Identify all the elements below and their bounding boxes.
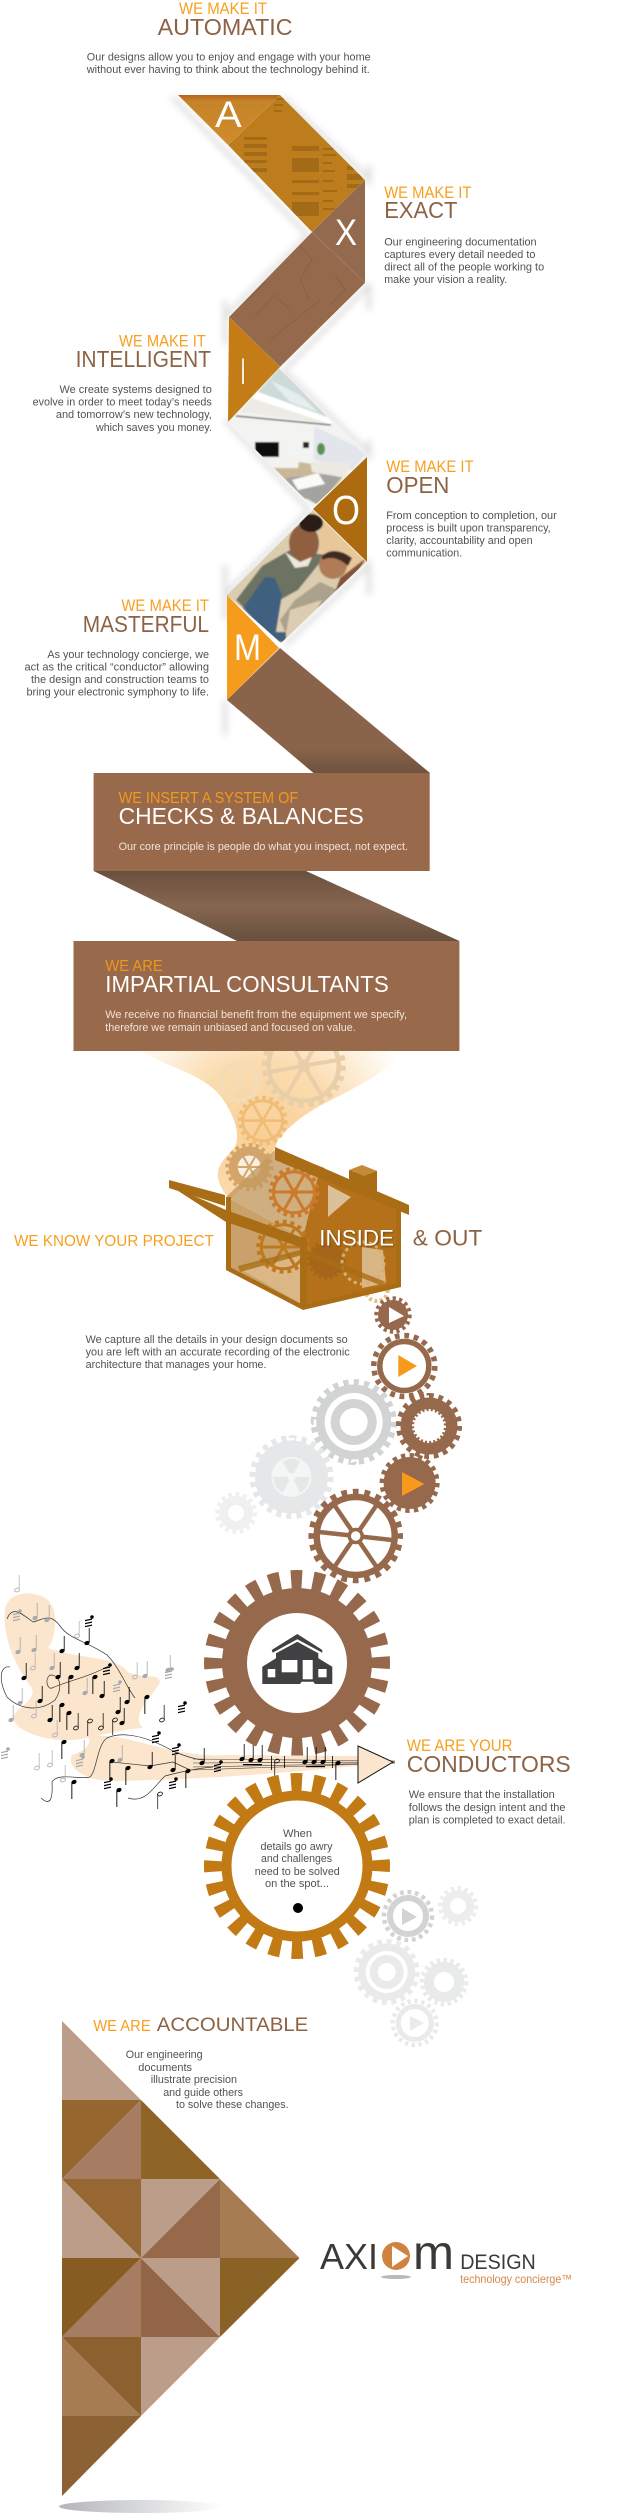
heading: inside: INSIDE — [319, 1226, 394, 1251]
heading: exact: EXACT — [384, 197, 457, 223]
text block: open: From conception to completion, our — [386, 510, 557, 522]
gear: faint — [217, 1494, 255, 1532]
text block: accountable — [126, 2049, 289, 2111]
text block: capture details: you are left with an accurate recording of the electronic — [86, 1347, 350, 1359]
heading: open — [386, 457, 474, 498]
text block: conductors — [409, 1789, 566, 1826]
text block: exact: direct all of the people working to — [384, 262, 544, 274]
heading: conductors — [407, 1736, 571, 1777]
photo: family — [227, 510, 366, 643]
logo: DESIGN — [460, 2251, 536, 2274]
heading: masterful: MASTERFUL — [83, 611, 209, 637]
gear: pale play — [393, 2001, 437, 2045]
music: flowing curves — [1, 1612, 213, 1801]
small gear below house — [366, 1279, 388, 1301]
text block: open — [386, 510, 557, 560]
ribbon panel: letter A — [178, 94, 280, 145]
text block: automatic — [86, 52, 371, 76]
gear: spoked — [311, 1492, 400, 1580]
heading: intelligent: WE MAKE IT — [119, 332, 206, 351]
ribbon panel: letter A: A — [215, 94, 242, 135]
gear: grey play — [384, 1892, 432, 1940]
ribbon fold to checks box — [227, 648, 430, 773]
gear: pale serrated — [422, 1960, 466, 2004]
arrow head — [358, 1746, 393, 1783]
music: grey notes — [1, 1575, 174, 1783]
text block: accountable: Our engineering — [126, 2049, 203, 2061]
text block: conductors: We ensure that the installation — [409, 1789, 555, 1801]
text block: intelligent: We create systems designed to — [60, 384, 212, 396]
music: staff lines — [193, 1759, 395, 1770]
gear text: When — [283, 1828, 312, 1840]
text block: masterful: bring your electronic symphony to life. — [26, 686, 209, 698]
icon: house — [262, 1634, 332, 1684]
heading: accountable: WE ARE — [93, 2018, 151, 2035]
text block: automatic: without ever having to think about the technology behind it. — [86, 64, 370, 76]
ribbon panel: letter X — [312, 180, 365, 283]
heading: exact: WE MAKE IT — [384, 183, 472, 202]
gear: solid play — [382, 1456, 437, 1510]
text block: masterful: the design and construction teams to — [31, 674, 209, 686]
gear: faint right — [440, 1888, 476, 1924]
text block: capture details — [86, 1334, 350, 1371]
text block: accountable: illustrate precision — [151, 2074, 237, 2086]
text block: intelligent: and tomorrow’s new technology, — [56, 409, 212, 421]
house: frame bands — [169, 1147, 409, 1310]
text block: accountable: documents — [138, 2062, 192, 2074]
gear: orange play — [374, 1336, 435, 1396]
panel: impartial consultants: IMPARTIAL CONSULTANTS — [105, 971, 389, 997]
text block: conductors: follows the design intent and the — [409, 1802, 566, 1814]
panel: impartial consultants — [74, 941, 459, 1051]
ribbon panel: letter X: X — [335, 212, 357, 253]
text block: accountable: to solve these changes. — [176, 2099, 289, 2111]
text block: conductors: plan is completed to exact detail. — [409, 1814, 566, 1826]
heading: exact — [384, 183, 472, 223]
text block: exact: make your vision a reality. — [384, 274, 507, 286]
gear text — [255, 1828, 340, 1890]
text block: intelligent — [33, 384, 212, 434]
music notes arrow — [1, 1575, 397, 1809]
logo: play circle — [381, 2242, 411, 2279]
ribbon panel: letter M — [227, 595, 279, 700]
music: cream wash — [5, 1593, 397, 1781]
text block: open: communication. — [386, 548, 462, 560]
heading: know your project: WE KNOW YOUR PROJECT — [14, 1233, 214, 1250]
text block: intelligent: which saves you money. — [95, 422, 212, 434]
logo: m — [413, 2227, 454, 2280]
gear: small play — [376, 1298, 410, 1332]
panel: impartial consultants: We receive no financial benefit from the equipment we specify, — [105, 1009, 407, 1021]
text block: capture details: architecture that manages your home. — [86, 1359, 266, 1371]
ribbon panel: brown blueprint — [229, 232, 365, 367]
ribbon panel: letter I — [228, 317, 280, 422]
gear text: need to be solved — [255, 1866, 340, 1878]
text block: accountable: and guide others — [163, 2087, 243, 2099]
ribbon fold between panels — [94, 871, 459, 941]
triangle mosaic — [62, 2021, 300, 2496]
panel: impartial consultants: WE ARE — [105, 958, 163, 975]
logo: AXI — [320, 2236, 378, 2277]
heading: open: WE MAKE IT — [386, 457, 474, 476]
gear text: details go awry — [260, 1841, 333, 1853]
gear: when details go awry — [214, 1783, 380, 1949]
text block: masterful: As your technology concierge, we — [47, 649, 209, 661]
funnel of gears — [140, 1027, 398, 1200]
music: black notes — [21, 1615, 341, 1809]
heading: conductors: WE ARE YOUR — [407, 1736, 512, 1755]
heading: automatic — [158, 0, 293, 40]
text block: exact — [384, 237, 544, 286]
heading: and out: & OUT — [413, 1226, 483, 1251]
panel: impartial consultants: therefore we remain unbiased and focused on value. — [105, 1022, 356, 1034]
heading: open: OPEN — [386, 472, 449, 498]
panel: checks and balances — [94, 773, 430, 871]
gear text: on the spot... — [265, 1878, 329, 1890]
heading: automatic: AUTOMATIC — [158, 14, 293, 40]
heading: intelligent — [76, 332, 211, 372]
gear: pale ring — [356, 1942, 417, 2002]
gear: grey ring — [314, 1382, 394, 1462]
house illustration — [169, 1147, 409, 1310]
text block: exact: Our engineering documentation — [384, 237, 537, 249]
ribbon panel: letter O — [313, 457, 367, 562]
house: interior gears — [258, 1169, 384, 1284]
house: chimney — [349, 1165, 377, 1195]
logo: technology concierge™ — [460, 2272, 572, 2286]
mosaic shadow — [59, 2500, 223, 2513]
text block: open: clarity, accountability and open — [386, 535, 533, 547]
gear: brown serrated — [398, 1396, 460, 1456]
heading: masterful — [83, 596, 209, 637]
text block: capture details: We capture all the details in your design documents so — [86, 1334, 348, 1346]
heading: masterful: WE MAKE IT — [121, 596, 209, 615]
text block: intelligent: evolve in order to meet today’s needs — [33, 396, 212, 408]
panel: checks and balances: WE INSERT A SYSTEM OF — [119, 790, 298, 807]
text block: masterful — [24, 649, 209, 698]
funnel gear: orange — [240, 1098, 286, 1144]
house: walls — [226, 1150, 401, 1308]
heading: conductors: CONDUCTORS — [407, 1751, 571, 1777]
logo — [320, 2227, 572, 2286]
funnel gear: pale — [219, 1062, 259, 1102]
heading: accountable: ACCOUNTABLE — [157, 2015, 308, 2036]
text block: automatic: Our designs allow you to enjoy and engage with your home — [87, 52, 371, 64]
photo: living room — [228, 368, 365, 506]
heading: accountable — [93, 2015, 308, 2036]
heading: intelligent: INTELLIGENT — [76, 346, 211, 372]
gear: pale fan — [252, 1438, 330, 1516]
ribbon panel: letter O: O — [332, 487, 360, 533]
text block: exact: captures every detail needed to — [384, 249, 535, 261]
ribbon panel: letter I: I — [240, 351, 246, 392]
text block: open: process is built upon transparency, — [386, 522, 551, 534]
panel: checks and balances: CHECKS & BALANCES — [119, 803, 364, 829]
panel: checks and balances: Our core principle is people do what you inspect, not expect. — [119, 841, 408, 853]
dot — [293, 1903, 303, 1913]
ribbon panel: orange blueprint — [228, 95, 365, 232]
funnel gear: large — [265, 1027, 343, 1105]
funnel gear: tan — [227, 1145, 271, 1189]
gear text: and challenges — [261, 1853, 332, 1865]
text block: masterful: act as the critical “conductor” allowing — [24, 662, 209, 674]
ribbon shadows — [172, 97, 370, 735]
gear: house icon — [214, 1580, 380, 1746]
ribbon panel: letter M: M — [234, 627, 261, 668]
